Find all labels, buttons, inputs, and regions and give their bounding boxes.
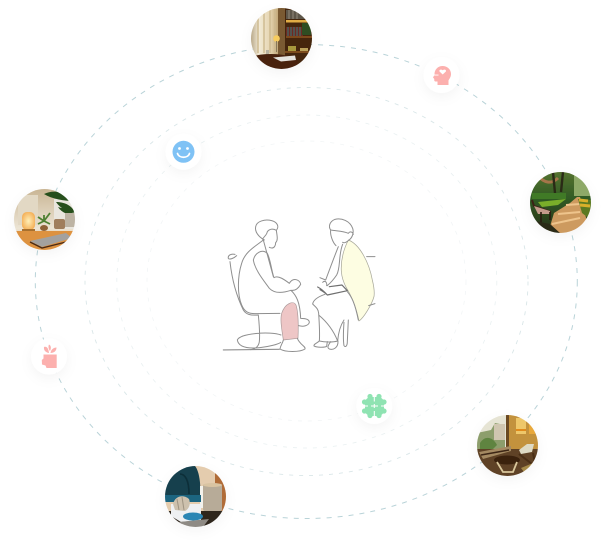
orbit rings: [35, 44, 577, 518]
man's shoe: [280, 338, 305, 351]
man's body and arm: [238, 240, 301, 314]
badge: head with sprouting leaves: [31, 338, 67, 374]
notebook: [318, 285, 347, 295]
floor line: [223, 348, 279, 352]
woman's torso and arm: [320, 244, 343, 286]
woman's chair: [343, 257, 375, 347]
photo: study with bookshelf: [251, 8, 312, 69]
woman's feet: [314, 341, 338, 349]
badge: puzzle brain: [356, 388, 392, 424]
woman's skirt and legs: [313, 292, 358, 342]
photo: garden path: [530, 172, 591, 233]
man's chair: [228, 254, 281, 350]
central illustration: counsellor and client: [223, 219, 375, 351]
woman's yellow shawl: [341, 240, 374, 321]
badge: head with heart: [424, 57, 460, 93]
woman's head and hair: [329, 219, 353, 246]
man's head: [255, 220, 278, 248]
photo: desk with lamp and plant: [14, 189, 75, 250]
man's thigh and far leg: [263, 240, 309, 326]
photo: sofa, cup and shell: [165, 466, 226, 527]
badge: smiling face: [166, 134, 202, 170]
photo: lounge with garden view: [477, 415, 538, 476]
man's pink trouser leg: [281, 303, 298, 340]
